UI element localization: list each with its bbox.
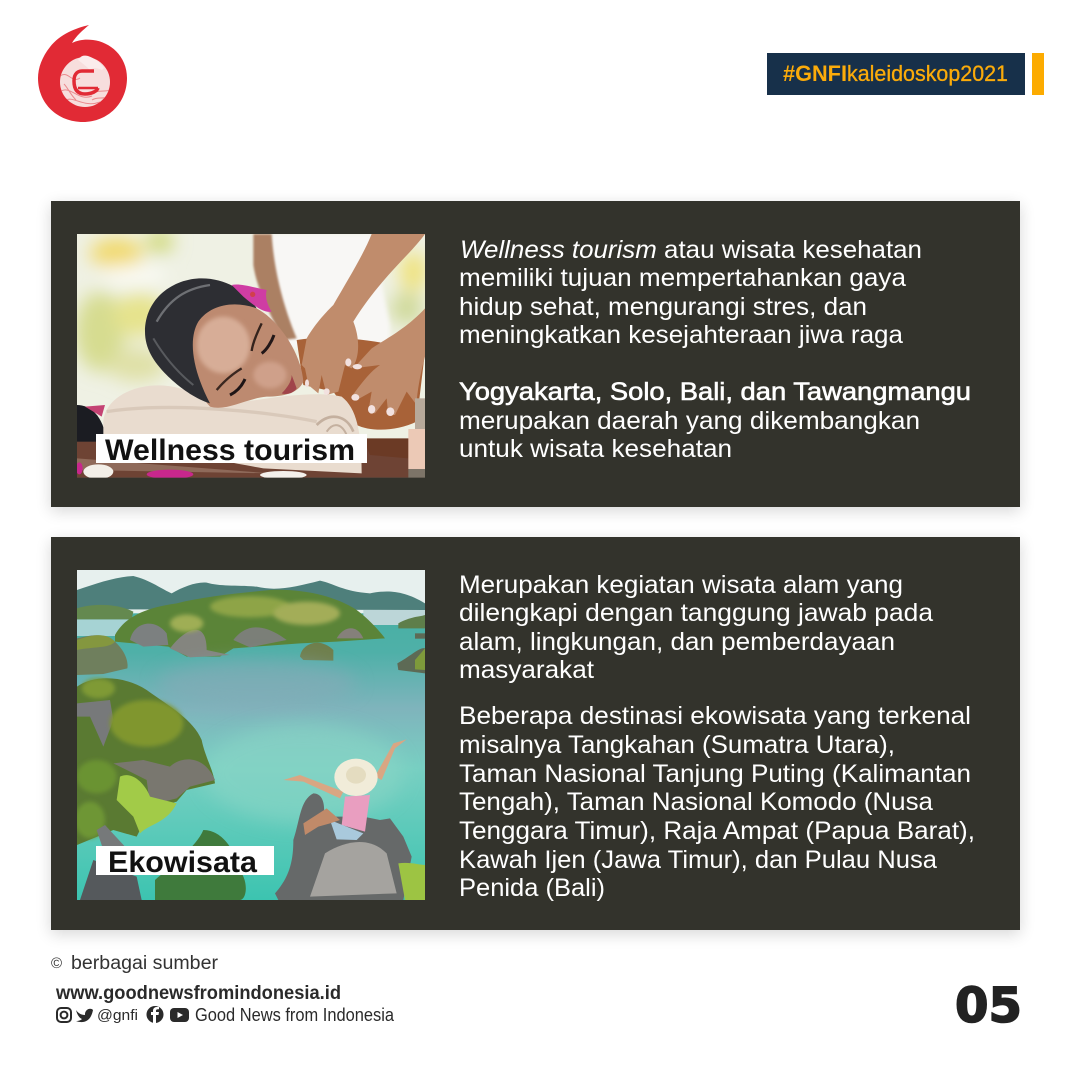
text block: wellness description: memiliki tujuan mempertahankan gaya — [459, 264, 906, 292]
text block: ekowisata definition — [459, 571, 933, 684]
text block: ekowisata destinations: Beberapa destinasi ekowisata yang terkenal — [459, 702, 971, 730]
bottom left rock and bushes — [96, 825, 124, 846]
text block: wellness description: hidup sehat, mengurangi stres, dan — [459, 293, 867, 321]
flower — [232, 285, 272, 312]
channel name: Good News from Indonesia — [195, 1005, 395, 1025]
website url: www.goodnewsfromindonesia.id — [55, 983, 341, 1004]
text block: ekowisata destinations: Tengah), Taman Nasional Komodo (Nusa — [459, 788, 933, 816]
big left island — [77, 678, 215, 845]
left islet — [77, 635, 128, 675]
orange accent bar — [1032, 53, 1044, 95]
text block: ekowisata definition: alam, lingkungan, dan pemberdayaan — [459, 628, 895, 656]
face — [186, 301, 303, 408]
social row — [57, 1005, 395, 1025]
text block: ekowisata definition: masyarakat — [459, 656, 594, 684]
image label: Wellness tourism: Wellness tourism — [105, 434, 355, 467]
bottom flowers — [147, 470, 193, 479]
hashtag badge: kaleidoskop2021 — [847, 61, 1008, 86]
shoulder — [297, 338, 425, 430]
page number: 05 — [955, 978, 1022, 1034]
hashtag badge — [767, 53, 1025, 95]
image label: Ekowisata: Ekowisata — [108, 846, 257, 879]
source credit: berbagai sumber — [71, 953, 219, 974]
panel: ekowisata — [51, 537, 1020, 934]
text block: ekowisata destinations: Kawah Ijen (Jawa Timur), dan Pulau Nusa — [459, 846, 937, 874]
text block: wellness description — [459, 236, 922, 349]
text block: ekowisata destinations: Taman Nasional Tanjung Puting (Kalimantan — [459, 760, 971, 788]
white ring with pattern — [60, 56, 110, 107]
far island — [115, 590, 385, 657]
towel — [103, 385, 362, 473]
table — [77, 442, 425, 478]
text block: wellness destinations: merupakan daerah yang dikembangkan — [459, 407, 920, 435]
right islet — [397, 648, 425, 673]
text block: wellness description: Wellness tourism atau wisata kesehatan — [460, 236, 922, 264]
text block: ekowisata destinations: Penida (Bali) — [459, 874, 605, 902]
hashtag badge: #GNFI — [783, 61, 847, 86]
text block: wellness destinations: Yogyakarta, Solo, Bali, dan Tawangmangu — [459, 378, 971, 406]
text block: ekowisata destinations: misalnya Tangkahan (Sumatra Utara), — [459, 731, 895, 759]
icon: facebook — [146, 1006, 164, 1023]
panel: wellness tourism — [51, 201, 1020, 511]
source credit: © — [51, 955, 62, 972]
foreground rock — [275, 793, 412, 900]
therapist arms and hands — [302, 234, 425, 395]
text block: wellness description: meningkatkan kesejahteraan jiwa raga — [459, 321, 903, 349]
photo: massage — [75, 230, 427, 479]
text block: ekowisata destinations — [459, 702, 975, 902]
text block: ekowisata definition: dilengkapi dengan tanggung jawab pada — [459, 599, 933, 627]
dark stones left — [77, 405, 104, 442]
logo: GNFI red emblem — [38, 25, 127, 122]
woman — [283, 775, 343, 798]
text block: wellness destinations: untuk wisata kesehatan — [459, 435, 732, 463]
light shallows — [203, 723, 403, 823]
bottle — [408, 429, 425, 469]
text block: wellness destinations — [459, 378, 971, 463]
handle: @gnfi — [97, 1007, 138, 1024]
icon: youtube — [170, 1008, 189, 1022]
text block: ekowisata destinations: Tenggara Timur), Raja Ampat (Papua Barat), — [459, 817, 975, 845]
icon: instagram — [57, 1008, 71, 1022]
text block: ekowisata definition: Merupakan kegiatan wisata alam yang — [459, 571, 903, 599]
hair — [145, 278, 257, 403]
icon: twitter — [76, 1009, 93, 1022]
photo: island lagoon — [75, 570, 425, 900]
